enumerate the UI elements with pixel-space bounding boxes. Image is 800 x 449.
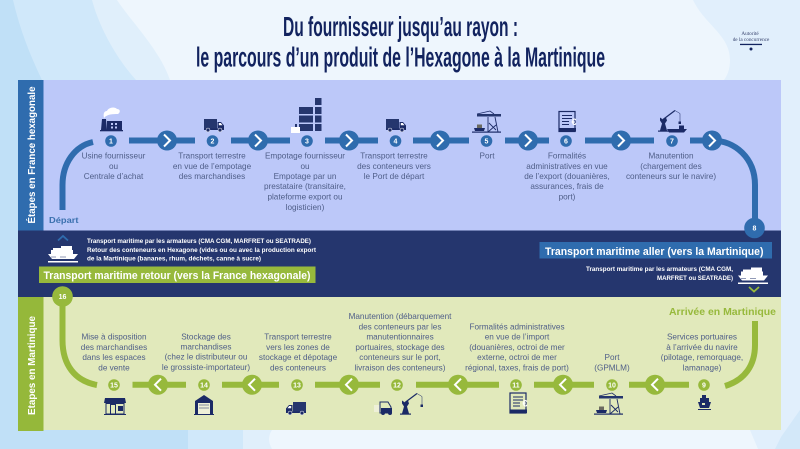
step 7: 7: [670, 138, 674, 146]
step 6: port): [559, 192, 576, 202]
step 10: (GPMLM): [594, 363, 630, 372]
icon: forklift and crane: [374, 394, 423, 415]
step 3: [264, 135, 346, 212]
step 5: Port: [479, 152, 495, 161]
panel: Étapes en Martinique: [18, 297, 781, 431]
step 3: ou: [300, 162, 310, 171]
title: Du fournisseur jusqu’au rayon :: [283, 11, 518, 42]
step 1: ou: [109, 162, 118, 171]
step 1: Usine fournisseur: [82, 152, 146, 161]
step 13: [259, 333, 338, 391]
step 9: Services portuaires: [667, 332, 737, 342]
step 15: des marchandises: [81, 343, 147, 352]
logo: Autorité de la concurrence: [733, 31, 770, 50]
step 3: 3: [305, 138, 309, 146]
step 15: [81, 333, 147, 391]
step 14: 14: [200, 382, 208, 390]
step 12: 12: [393, 382, 401, 390]
text: retour details: [87, 238, 317, 262]
step 2: Transport terrestre: [178, 152, 246, 161]
step 5: 5: [485, 138, 489, 146]
step 8: [744, 218, 765, 238]
step 12: Manutention (débarquement: [349, 312, 452, 321]
step 11: [465, 322, 569, 391]
step 7: Manutention: [648, 152, 694, 161]
step 3: plateforme export ou: [267, 192, 343, 202]
text: retour details: Retour des conteneurs en Hexagone (vides ou ou avec la production export: [87, 247, 317, 254]
step 4: [357, 135, 431, 181]
step 9: à l’arrivée du navire: [666, 343, 738, 352]
icon: warehouse: [194, 395, 214, 415]
text: aller details: MARFRET ou SEATRADE): [657, 275, 733, 282]
icon: aller chevron: [749, 287, 759, 292]
step 7: conteneurs sur le navire): [626, 172, 716, 181]
panel: Étapes en France hexagonale: [18, 80, 781, 231]
heading: Transport maritime retour: Transport maritime retour (vers la France hexagonale): [44, 270, 311, 282]
panel: maritime band: [18, 230, 781, 297]
chevrons: France: [157, 130, 722, 150]
icon: port: [594, 393, 623, 415]
step 11: (douanières, octroi de mer: [469, 343, 565, 352]
step 12: portuaires, stockage des: [355, 343, 445, 352]
icon: truck: [386, 119, 406, 132]
icon: port: [472, 111, 501, 133]
chevrons: Martinique: [148, 375, 665, 395]
step 15: dans les espaces: [82, 353, 146, 362]
icon: factory: [100, 108, 123, 131]
step 2: 2: [211, 138, 215, 146]
logo: Autorité de la concurrence: de la concurrence: [733, 37, 770, 43]
step 3: Empotage fournisseur: [265, 152, 345, 161]
text: retour details: de la Martinique (bananes, rhum, déchets, canne à sucre): [87, 256, 261, 262]
step 13: vers les zones de: [266, 343, 330, 352]
step 7: (chargement des: [640, 162, 702, 171]
band label: France: [18, 80, 44, 231]
step 6: [524, 135, 610, 202]
step 16: [52, 286, 73, 307]
icon: ship aller: [738, 268, 768, 284]
step 12: manutentionnaires: [366, 332, 434, 342]
icon: crane and ship: [658, 110, 687, 132]
step 11: externe, octroi de mer: [477, 353, 557, 362]
step 6: assurances, frais de: [530, 182, 604, 191]
step 4: des conteneurs vers: [357, 162, 431, 171]
step 12: des conteneurs par les: [359, 322, 441, 331]
step 10: 10: [608, 382, 616, 390]
icon: ship return: [48, 246, 78, 262]
step 14: (chez le distributeur ou: [165, 353, 248, 362]
step 12: livraison des conteneurs): [354, 363, 446, 372]
step 12: conteneurs sur le port,: [359, 353, 441, 362]
step 14: le grossiste-importateur): [162, 363, 250, 372]
text: aller details: [586, 266, 733, 282]
step 3: Empotage par un: [274, 172, 337, 181]
icon: document: [510, 393, 528, 413]
logo: Autorité de la concurrence: Autorité: [741, 31, 759, 37]
step 2: en vue de l’empotage: [173, 162, 252, 171]
step 1: [82, 135, 146, 181]
step 2: [173, 135, 252, 181]
step 6: 6: [564, 138, 568, 146]
step 4: Transport terrestre: [360, 152, 428, 161]
step 11: Formalités administratives: [469, 322, 565, 331]
step 13: stockage et dépotage: [259, 353, 338, 362]
step 15: de vente: [98, 363, 130, 372]
icon: truck: [286, 402, 306, 415]
step 9: [661, 332, 743, 391]
step 5: [479, 135, 495, 161]
icon: truck: [204, 119, 224, 132]
step 2: des marchandises: [179, 172, 245, 181]
step 4: le Port de départ: [364, 172, 425, 181]
step 10: Port: [604, 353, 620, 362]
band label: Martinique: [18, 297, 44, 431]
step 9: 9: [702, 382, 706, 390]
step 1: Centrale d’achat: [84, 172, 144, 181]
icon: tug boat: [698, 395, 711, 410]
step 3: prestataire (transitaire,: [264, 182, 346, 191]
icon: document: [559, 112, 577, 132]
text: aller details: Transport maritime par les armateurs (CMA CGM,: [586, 266, 733, 273]
step 10: [594, 353, 630, 391]
step 6: administratives en vue: [526, 162, 608, 171]
step 15: Mise à disposition: [81, 333, 147, 342]
step 13: des conteneurs: [270, 363, 326, 372]
step 14: marchandises: [181, 343, 231, 352]
title: [196, 11, 605, 72]
icon: containers: [291, 98, 322, 133]
step 11: en vue de l’import: [485, 332, 550, 342]
step 16: 16: [59, 294, 66, 301]
step 4: 4: [394, 138, 398, 146]
step 14: Stockage des: [181, 332, 231, 341]
band label: Martinique: Etapes en Martinique: [27, 316, 38, 415]
step 6: Formalités: [548, 152, 586, 161]
heading: Transport maritime aller: Transport maritime aller (vers la Martinique): [545, 246, 764, 258]
step 1: 1: [109, 138, 113, 146]
step 13: Transport terrestre: [264, 333, 332, 342]
step 12: [349, 312, 452, 391]
text: retour details: Transport maritime par les armateurs (CMA CGM, MARFRET ou SEATRADE): [87, 238, 311, 245]
band label: France: Étapes en France hexagonale: [25, 86, 38, 224]
label: Arrivée en Martinique: Arrivée en Martinique: [669, 307, 776, 318]
step 8: 8: [753, 226, 757, 232]
step 11: 11: [512, 382, 520, 390]
step 14: [162, 332, 250, 391]
step 13: 13: [293, 382, 301, 390]
route line: Martinique: [62, 300, 755, 386]
step 9: (pilotage, remorquage,: [661, 353, 743, 362]
route line: France: [62, 140, 755, 225]
icon: store: [104, 398, 126, 415]
step 3: logisticien): [286, 203, 325, 212]
step 15: 15: [110, 382, 118, 390]
step 9: lamanage): [683, 363, 722, 372]
icon: return chevron: [58, 236, 68, 240]
label: Départ: Départ: [49, 215, 79, 225]
step 6: de l’export (douanières,: [524, 172, 610, 181]
heading: Transport maritime retour: [38, 266, 316, 284]
step 7: [626, 135, 716, 181]
step 11: régional, taxes, frais de port): [465, 363, 569, 372]
